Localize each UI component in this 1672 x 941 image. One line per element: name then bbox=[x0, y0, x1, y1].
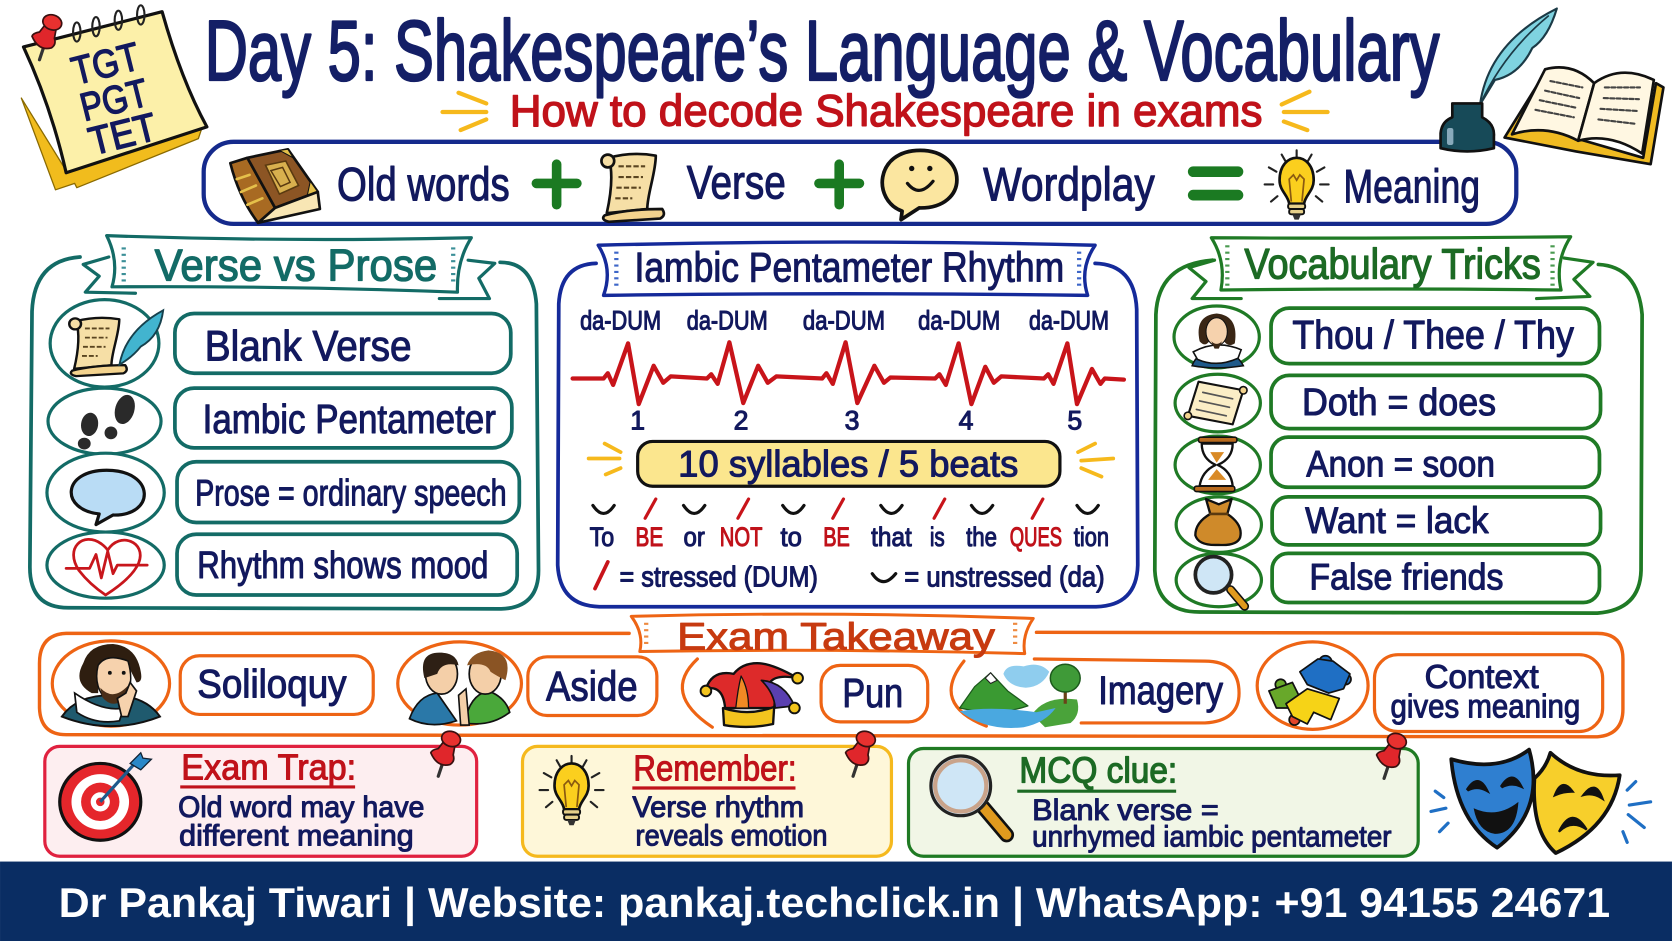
beat numbers bbox=[630, 406, 1082, 436]
beat labels: da-DUM bbox=[687, 305, 768, 335]
icon: footprints bbox=[78, 392, 138, 449]
scansion line: To be or not to be: to bbox=[781, 522, 802, 552]
callout: remember: reveals emotion bbox=[636, 820, 827, 853]
icon: scroll with feather bbox=[69, 310, 163, 376]
subtitle with rays: How to decode Shakespeare in exams bbox=[510, 86, 1263, 136]
heading: exam takeaway: Exam Takeaway bbox=[677, 615, 996, 658]
icon: light bulb bbox=[1265, 150, 1329, 220]
callout: MCQ clue bbox=[909, 731, 1418, 856]
row: rhythm: Rhythm shows mood bbox=[197, 544, 488, 587]
beat labels: da-DUM bbox=[918, 305, 1000, 335]
icon: two people whispering bbox=[409, 650, 510, 725]
icon: magnifying glass bbox=[931, 756, 1007, 835]
row: blank verse: Blank Verse bbox=[205, 322, 412, 370]
formula bar: old words + verse + wordplay = meaning bbox=[204, 142, 1516, 224]
row: false friends: False friends bbox=[1309, 556, 1503, 598]
row: false friends bbox=[1176, 553, 1599, 607]
icon: TGT PGT TET sticky note: PGT bbox=[76, 71, 153, 130]
row: iambic pentameter bbox=[48, 388, 512, 454]
beat labels: da-DUM bbox=[1029, 305, 1109, 335]
text: old words: Old words bbox=[337, 158, 510, 210]
text: remember body: Verse rhythm bbox=[632, 791, 804, 824]
icon: thinking Shakespeare bbox=[62, 644, 160, 726]
banner: exam takeaway bbox=[631, 614, 1033, 658]
icon: quill and inkwell bbox=[1441, 9, 1557, 151]
beat labels: da-DUM bbox=[803, 305, 885, 335]
item: context gives meaning: gives meaning bbox=[1390, 689, 1580, 726]
scansion line: To be or not to be: To bbox=[590, 522, 614, 552]
icon: target with arrow bbox=[60, 753, 151, 840]
scansion line: To be or not to be: BE bbox=[823, 522, 850, 552]
icon: Shakespeare portrait bbox=[1192, 313, 1243, 368]
scansion line: To be or not to be bbox=[590, 522, 1109, 552]
beat labels: da-DUM bbox=[580, 305, 661, 335]
row: doth does: Doth = does bbox=[1302, 381, 1496, 424]
banner: verse vs prose bbox=[83, 236, 495, 299]
row: want lack: Want = lack bbox=[1305, 499, 1489, 541]
text: MCQ clue body: Blank verse = bbox=[1032, 794, 1219, 827]
icon: scroll bbox=[601, 154, 664, 222]
legend: = stressed (DUM) bbox=[620, 561, 818, 593]
callout: 10 syllables / 5 beats: 10 syllables / 5 beats bbox=[678, 443, 1018, 485]
legend: = unstressed (da) bbox=[904, 561, 1105, 593]
icon: smiling speech bubble bbox=[882, 150, 957, 220]
icon: TGT PGT TET sticky note: TGT bbox=[67, 35, 144, 94]
row: thou thee thy: Thou / Thee / Thy bbox=[1292, 314, 1574, 358]
chart: heartbeat rhythm line bbox=[573, 342, 1124, 404]
icon: light bulb bbox=[540, 756, 604, 825]
icon: plus bbox=[819, 164, 859, 205]
icon: pushpin bbox=[431, 729, 463, 776]
icon: scroll bbox=[1184, 382, 1247, 424]
heading: iambic pentameter rhythm: Iambic Pentameter Rhythm bbox=[634, 244, 1064, 291]
icon: speech bubble bbox=[71, 470, 144, 525]
row: anon soon bbox=[1175, 436, 1599, 494]
heading: MCQ clue: MCQ clue: bbox=[1019, 750, 1177, 791]
item: aside: Aside bbox=[546, 663, 638, 710]
row: blank verse bbox=[50, 300, 511, 387]
stress marks bbox=[593, 499, 1098, 518]
callout: MCQ clue: unrhymed iambic pentameter bbox=[1032, 821, 1392, 854]
text: meaning: Meaning bbox=[1344, 161, 1480, 213]
item: context gives meaning bbox=[1257, 642, 1603, 731]
item: imagery: Imagery bbox=[1098, 669, 1223, 713]
item: soliloquy bbox=[52, 641, 373, 726]
beat numbers: 4 bbox=[959, 406, 974, 436]
row: iambic pentameter: Iambic Pentameter bbox=[203, 396, 496, 442]
text: wordplay: Wordplay bbox=[983, 158, 1155, 210]
callout: remember bbox=[523, 729, 891, 856]
row: want lack bbox=[1176, 497, 1601, 552]
scansion line: To be or not to be: is bbox=[930, 522, 945, 552]
heading: exam trap: Exam Trap: bbox=[181, 746, 356, 787]
row: prose bbox=[47, 453, 519, 532]
item: context gives meaning: Context bbox=[1425, 659, 1539, 696]
panel: iambic pentameter rhythm bbox=[558, 242, 1138, 607]
callout: exam trap: different meaning bbox=[179, 820, 414, 853]
icon: TGT PGT TET sticky note bbox=[21, 5, 207, 190]
panel: exam takeaway bbox=[39, 614, 1623, 737]
panel: vocabulary tricks bbox=[1155, 237, 1642, 613]
row: prose: Prose = ordinary speech bbox=[195, 471, 507, 513]
heading: vocabulary tricks: Vocabulary Tricks bbox=[1244, 240, 1541, 288]
callout: exam trap bbox=[45, 729, 477, 856]
icon: equals bbox=[1193, 172, 1238, 195]
panel: verse vs prose bbox=[30, 236, 539, 609]
beat numbers: 5 bbox=[1067, 406, 1082, 436]
scansion line: To be or not to be: QUES bbox=[1010, 522, 1062, 552]
heading: verse vs prose: Verse vs Prose bbox=[155, 240, 437, 290]
scansion line: To be or not to be: or bbox=[684, 522, 705, 552]
footer contact text: Dr Pankaj Tiwari | Website: pankaj.techclick.in | WhatsApp: +91 94155 24671 bbox=[59, 879, 1610, 927]
item: aside bbox=[398, 642, 657, 725]
icon: TGT PGT TET sticky note: TET bbox=[84, 105, 161, 164]
icon: jester hat bbox=[701, 663, 803, 727]
text: verse: Verse bbox=[687, 156, 786, 208]
legend bbox=[595, 561, 1105, 593]
beat numbers: 1 bbox=[630, 406, 645, 436]
icon: open book bbox=[1505, 67, 1663, 164]
scansion line: To be or not to be: tion bbox=[1074, 522, 1109, 552]
icon: money bag bbox=[1195, 499, 1241, 545]
row: thou thee thy bbox=[1174, 306, 1599, 368]
scansion line: To be or not to be: NOT bbox=[720, 522, 762, 552]
row: rhythm bbox=[47, 532, 517, 598]
footer bar bbox=[0, 862, 1672, 941]
icon: old book bbox=[230, 149, 320, 223]
text: exam trap body: Old word may have bbox=[178, 791, 424, 824]
icon: hourglass bbox=[1194, 437, 1237, 492]
banner: iambic pentameter rhythm bbox=[598, 242, 1095, 295]
icon: pushpin bbox=[1377, 731, 1408, 778]
item: pun bbox=[682, 659, 928, 727]
banner: vocabulary tricks bbox=[1189, 237, 1593, 299]
row: anon soon: Anon = soon bbox=[1306, 443, 1495, 485]
item: soliloquy: Soliloquy bbox=[197, 662, 347, 706]
icon: pushpin bbox=[846, 729, 877, 776]
icon: comedy and tragedy masks bbox=[1431, 750, 1651, 853]
row: doth does bbox=[1175, 374, 1601, 432]
icon: heart with pulse bbox=[66, 539, 147, 595]
callout: 10 syllables / 5 beats bbox=[589, 441, 1113, 486]
scansion line: To be or not to be: that bbox=[871, 522, 912, 552]
item: pun: Pun bbox=[842, 670, 903, 716]
scansion line: To be or not to be: BE bbox=[636, 522, 663, 552]
icon: plus bbox=[536, 164, 577, 205]
item: imagery bbox=[951, 659, 1239, 728]
beat labels bbox=[580, 305, 1109, 335]
beat numbers: 2 bbox=[734, 406, 749, 436]
heading: remember: Remember: bbox=[633, 748, 797, 789]
beat numbers: 3 bbox=[845, 406, 859, 436]
icon: landscape bbox=[960, 664, 1080, 728]
scansion line: To be or not to be: the bbox=[966, 522, 997, 552]
icon: puzzle pieces bbox=[1269, 656, 1351, 725]
icon: magnifier bbox=[1195, 557, 1245, 606]
